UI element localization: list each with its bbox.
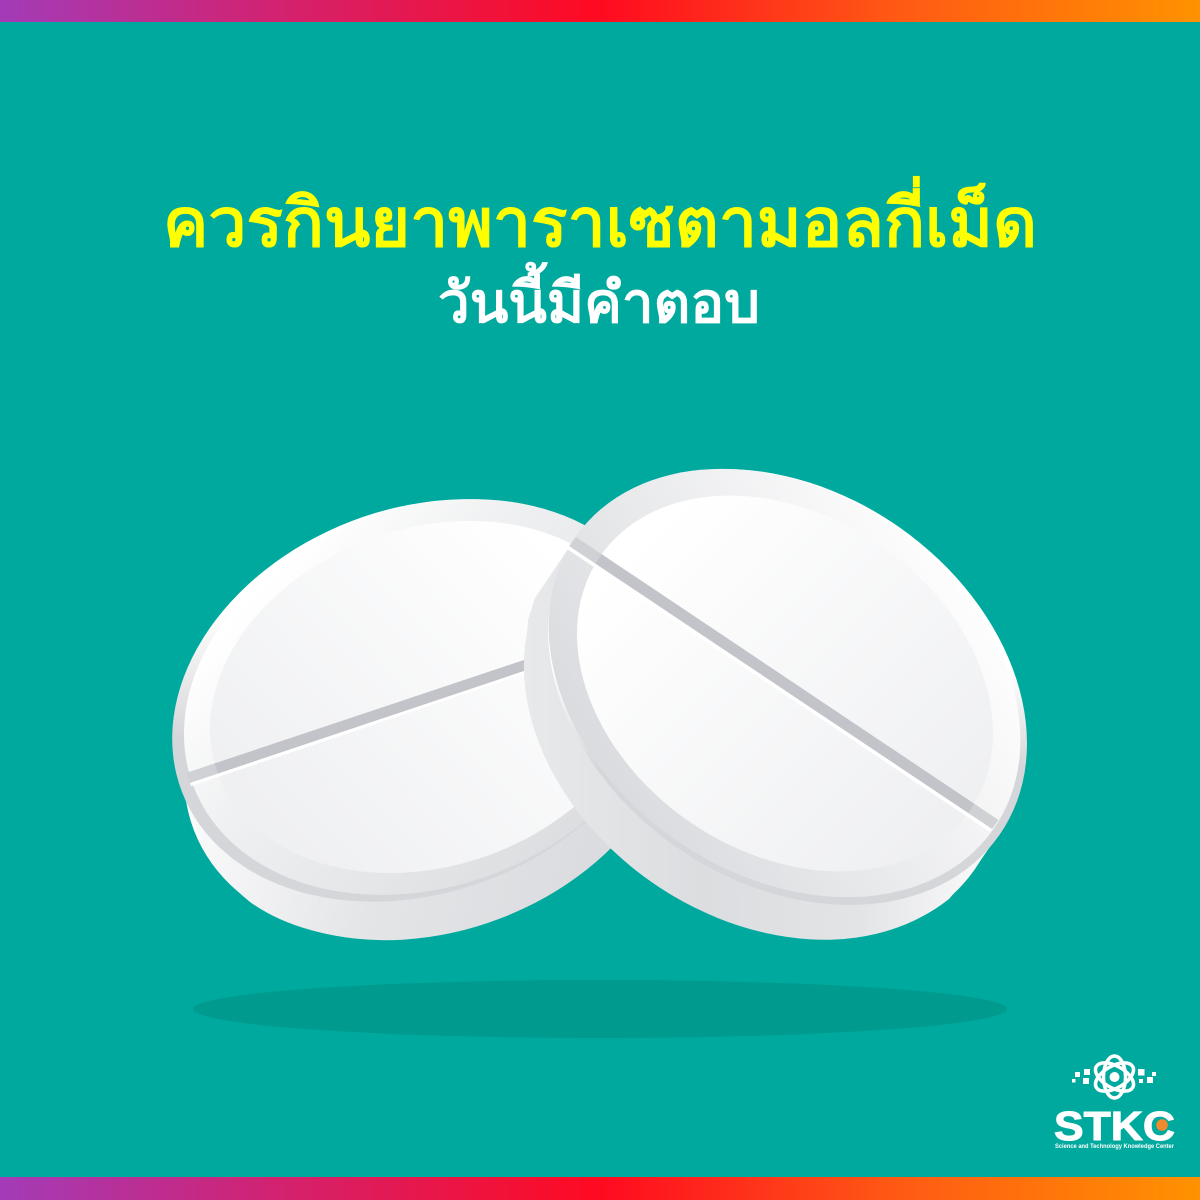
ground shadow (193, 980, 1007, 1038)
right tablet face (505, 418, 1065, 949)
right tablet (524, 468, 1027, 940)
icon: atom (1091, 1056, 1138, 1098)
right tablet score line (567, 537, 998, 832)
right tablet side (440, 414, 1086, 1030)
logo: STKC (1054, 1056, 1175, 1150)
bottom gradient bar (0, 1177, 1200, 1200)
subtitle: วันนี้มีคำตอบ (438, 262, 760, 334)
left tablet face (161, 463, 699, 931)
left tablet (172, 499, 611, 940)
logo wordmark: STKC (1054, 1103, 1175, 1149)
logo orange dot (1154, 1118, 1170, 1132)
left tablet score line (189, 660, 524, 786)
logo tagline: Science and Technology Knowledge Center (1055, 1143, 1174, 1150)
left tablet side (125, 468, 739, 1010)
right tablet rim (464, 379, 1111, 995)
top gradient bar (0, 0, 1200, 22)
icon: pixel dots (1072, 1069, 1156, 1084)
left tablet rim (113, 430, 728, 971)
title: ควรกินยาพาราเซตามอลกี่เม็ด (163, 175, 1037, 261)
